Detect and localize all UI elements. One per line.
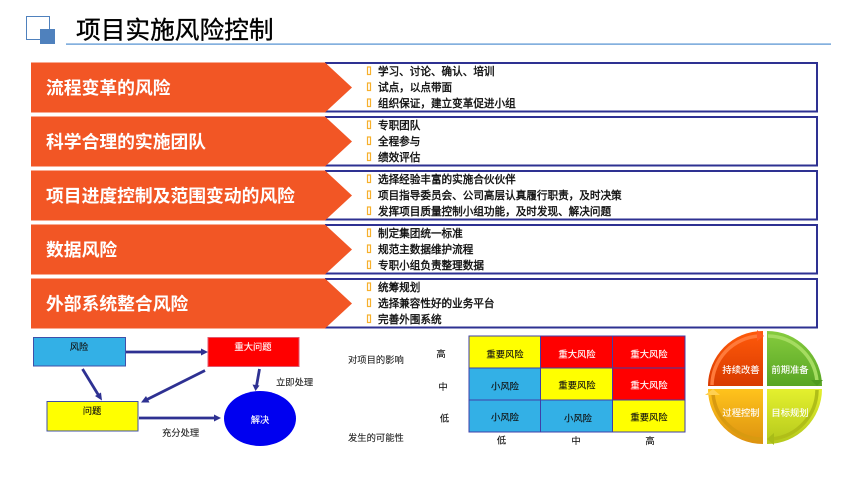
arrow: 风险 to 问题 xyxy=(82,369,102,400)
row 3 bullets: 选择经验丰富的实施合伙伙伴 xyxy=(378,173,516,186)
wheel quadrant: 目标规划: 目标规划 xyxy=(771,407,809,418)
panel: 流程变革的风险 xyxy=(31,62,817,112)
matrix column labels: 低 xyxy=(497,434,506,446)
row 3 bullets xyxy=(368,173,622,218)
row 3 banner xyxy=(31,170,352,220)
wheel quadrant: 前期准备: 前期准备 xyxy=(771,364,809,375)
label: 立即处理: 立即处理 xyxy=(276,376,313,388)
matrix row labels: 低 xyxy=(440,412,449,424)
row 5 content frame xyxy=(326,279,817,328)
matrix cell labels: 重要风险 xyxy=(558,380,596,390)
matrix column labels: 高 xyxy=(645,435,655,446)
label: 充分处理: 充分处理 xyxy=(162,427,199,438)
row 5 bullets: 统筹规划 xyxy=(378,281,420,294)
row 2 content frame xyxy=(326,117,817,166)
panel: 科学合理的实施团队 xyxy=(31,116,817,166)
matrix column labels: 中 xyxy=(571,435,581,446)
row 1 banner xyxy=(31,62,352,112)
row 5 heading: 外部系统整合风险 xyxy=(46,293,188,314)
row 2 bullets: 专职团队 xyxy=(378,119,421,132)
row 4 bullets xyxy=(368,227,484,272)
risk matrix xyxy=(348,336,685,446)
arrow: 重大问题 to 解决 xyxy=(252,369,260,391)
title: 项目实施风险控制 xyxy=(76,16,274,44)
row 5 bullets: 选择兼容性好的业务平台 xyxy=(378,297,495,310)
matrix cell labels: 小风险 xyxy=(564,412,593,424)
row 1 bullets: 组织保证，建立变革促进小组 xyxy=(378,97,516,110)
row 4 bullets: 专职小组负责整理数据 xyxy=(378,259,484,272)
matrix cell labels: 重要风险 xyxy=(486,348,524,360)
row 3 heading: 项目进度控制及范围变动的风险 xyxy=(46,185,295,206)
node: 重大问题 xyxy=(208,338,299,366)
node: 重大问题: 重大问题 xyxy=(234,341,272,352)
matrix cell labels: 重大风险 xyxy=(558,348,596,360)
matrix axis label: impact: 对项目的影响 xyxy=(348,354,404,365)
row 4 bullets: 规范主数据维护流程 xyxy=(378,243,474,256)
wheel quadrant: 过程控制: 过程控制 xyxy=(722,407,760,418)
row 1 bullets: 试点，以点带面 xyxy=(378,82,452,94)
row 5 bullets: 完善外围系统 xyxy=(378,313,442,326)
matrix row labels: 中 xyxy=(438,381,448,392)
node: 风险: 风险 xyxy=(70,341,89,352)
arrow: 重大问题 to 问题 xyxy=(141,370,205,402)
row 1 heading: 流程变革的风险 xyxy=(46,77,171,98)
row 5 bullets xyxy=(368,281,495,326)
row 5 banner xyxy=(31,278,352,328)
title underline xyxy=(66,44,831,45)
flow diagram xyxy=(34,338,313,446)
matrix cell labels: 重要风险 xyxy=(630,412,668,422)
row 4 bullets: 制定集团统一标准 xyxy=(378,227,463,240)
wheel quadrant: 持续改善: 持续改善 xyxy=(722,364,760,375)
arrow: 风险 to 重大问题 xyxy=(126,348,208,356)
matrix cell labels: 小风险 xyxy=(491,380,520,392)
row 3 content frame xyxy=(326,171,817,220)
matrix cells xyxy=(469,336,685,432)
row 1 content frame xyxy=(326,63,817,112)
row 2 banner xyxy=(31,116,352,166)
matrix row labels: 高 xyxy=(436,348,446,359)
matrix cell labels: 重大风险 xyxy=(630,348,668,360)
row 2 bullets xyxy=(368,119,421,164)
header icon xyxy=(26,16,55,44)
row 3 bullets: 项目指导委员会、公司高层认真履行职责，及时决策 xyxy=(378,189,622,202)
row 4 content frame xyxy=(326,225,817,274)
matrix axis label: likelihood: 发生的可能性 xyxy=(348,432,404,443)
matrix cell labels: 小风险 xyxy=(491,412,520,422)
matrix column labels xyxy=(497,434,655,446)
matrix cell labels xyxy=(486,348,668,424)
node: 解决 xyxy=(224,391,296,446)
cycle wheel xyxy=(705,330,823,445)
row 2 bullets: 全程参与 xyxy=(378,135,420,148)
panel: 数据风险 xyxy=(31,224,817,274)
row 1 bullets: 学习、讨论、确认、培训 xyxy=(378,65,495,78)
arrow: 问题 to 解决 xyxy=(139,414,221,422)
node: 问题: 问题 xyxy=(83,405,101,416)
matrix cell labels: 重大风险 xyxy=(630,380,668,390)
row 2 bullets: 绩效评估 xyxy=(378,151,421,164)
row 4 heading: 数据风险 xyxy=(46,239,117,260)
node: 解决: 解决 xyxy=(251,414,269,425)
row 2 heading: 科学合理的实施团队 xyxy=(46,131,206,152)
node: 问题 xyxy=(47,402,138,431)
row 3 bullets: 发挥项目质量控制小组功能，及时发现、解决问题 xyxy=(378,205,611,218)
row 1 bullets xyxy=(368,65,516,110)
panel: 项目进度控制及范围变动的风险 xyxy=(31,170,817,220)
node: 风险 xyxy=(34,338,126,366)
row 4 banner xyxy=(31,224,352,274)
matrix row labels xyxy=(436,348,449,424)
panel: 外部系统整合风险 xyxy=(31,278,817,328)
